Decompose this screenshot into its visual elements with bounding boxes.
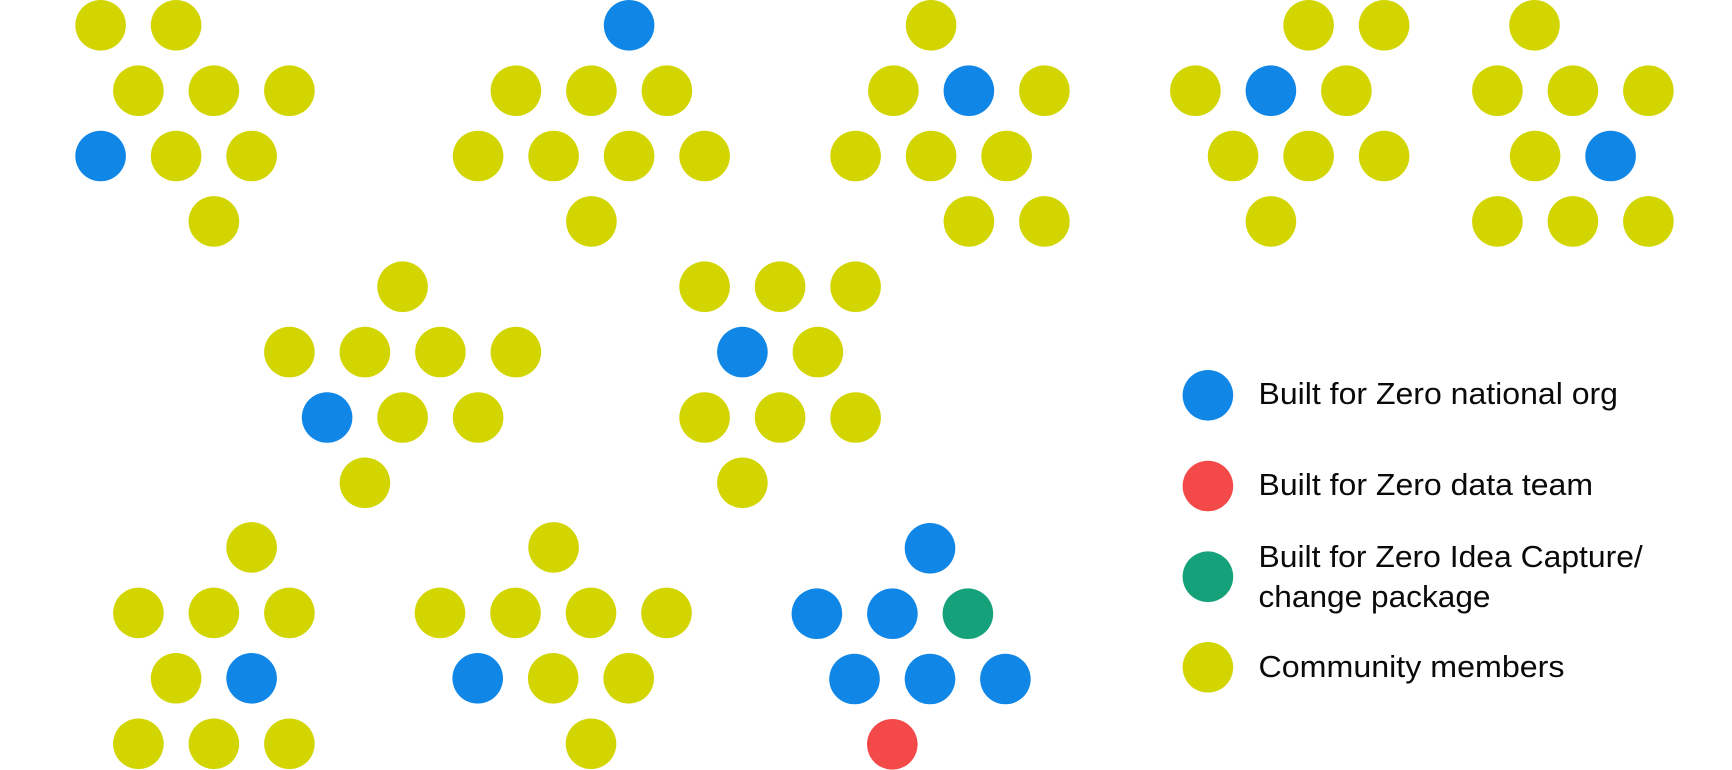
- cluster 10: Built for Zero team with data and idea capture roles: [792, 523, 1031, 770]
- cluster 8: community team, bottom row left: [113, 522, 315, 769]
- cluster 4: community team, row 1 fourth: [1170, 0, 1409, 247]
- legend item: Built for Zero national org: Built for Zero national org: [1258, 376, 1618, 411]
- legend item: Built for Zero Idea Capture/change package: [1183, 539, 1643, 614]
- cluster 6: community team, middle row left: [264, 261, 541, 508]
- cluster 5: community team, row 1 right: [1472, 0, 1674, 247]
- legend item: Built for Zero Idea Capture/change package: Built for Zero Idea Capture/: [1258, 539, 1643, 574]
- legend item: Built for Zero data team: [1183, 461, 1593, 511]
- legend item: Community members: [1183, 642, 1564, 693]
- legend item: Built for Zero national org: [1183, 370, 1618, 421]
- legend item: Built for Zero Idea Capture/change package: change package: [1258, 579, 1490, 614]
- cluster 9: community team, bottom row middle: [415, 522, 692, 769]
- legend item: Built for Zero data team: Built for Zero data team: [1258, 467, 1593, 502]
- cluster 2: community team, row 1 second: [453, 0, 730, 247]
- cluster 1: community team, row 1 left: [75, 0, 315, 247]
- legend: [1183, 370, 1643, 693]
- cluster 3: community team, row 1 third: [830, 0, 1070, 247]
- cluster 7: community team, middle row right: [679, 261, 881, 508]
- legend item: Community members: Community members: [1258, 649, 1564, 684]
